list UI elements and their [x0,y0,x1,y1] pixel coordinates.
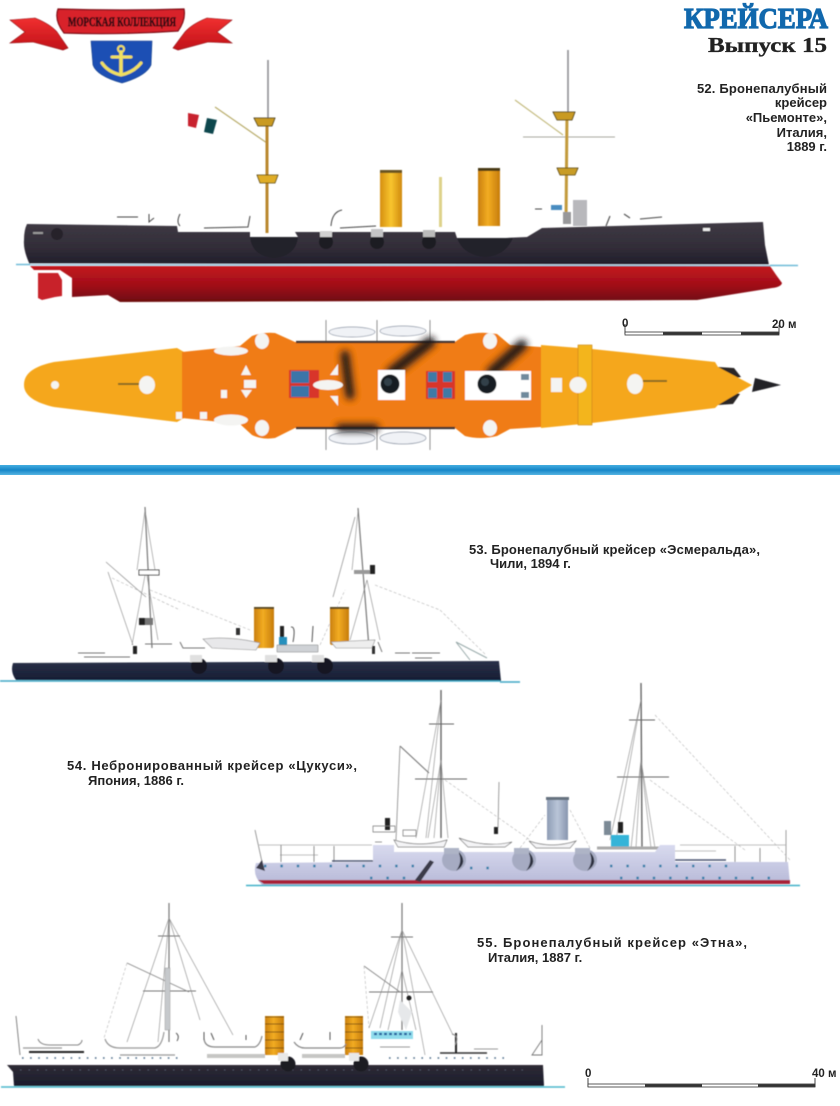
deck hatches [289,370,455,399]
scale bar 20 m: 0 [622,318,628,330]
boats and davit lines [326,320,430,450]
title: КРЕЙСЕРА: КРЕЙСЕРА [684,2,828,35]
cyan bridge [371,1031,413,1039]
ship 54 side elevation [246,683,800,886]
superstructure details [78,626,440,658]
ribbon left tail [10,18,68,50]
funnels [265,1016,363,1055]
caption: ship 52: «Пьемонте», [746,110,827,125]
header emblem: ribbon and shield [10,9,232,83]
scale bar 40 m: 0 [585,1068,591,1080]
portholes [264,866,780,878]
caption: ship 55: Италия, 1887 г. [488,950,582,965]
shield with anchor [91,41,152,83]
caption: ship 52: 52. Бронепалубный [697,81,827,96]
masts and rigging [16,903,542,1055]
caption: ship 55: 55. Бронепалубный крейсер «Этна», [477,935,747,950]
waterline [1,1086,565,1088]
scale bar 20 m: 20 м [772,319,796,331]
masts and rigging [106,507,487,660]
aft hull and ram [541,345,781,428]
deck details [117,200,662,228]
scale bar 20 m [622,318,796,335]
waterline [246,884,800,886]
ribbon lettering: МОРСКАЯ КОЛЛЕКЦИЯ [68,14,176,29]
deck portholes [22,1057,505,1059]
sponsons [190,655,333,674]
ship 55 side elevation [1,903,565,1087]
ship 53 side elevation [0,507,520,682]
caption: ship 53: Чили, 1894 г. [490,556,571,571]
fore gaff and mast [515,50,615,223]
hull [12,661,501,681]
dark upper hull [24,222,769,265]
caption: ship 55 [477,935,747,965]
caption: ship 52: 1889 г. [787,139,827,154]
blue divider band [0,465,840,475]
funnels seen from above [378,370,531,400]
upper works [258,818,786,862]
main orange deck [182,333,541,439]
hull shadows [296,342,455,428]
hull details [20,1069,530,1071]
masts and rigging [255,683,790,862]
caption: ship 52: Италия, [777,125,827,140]
red boot topping [258,880,790,884]
bow and stern dark marks [256,860,434,882]
funnels [380,168,500,227]
funnels [254,607,349,648]
scale bar 40 m: 40 м [812,1068,836,1080]
flag [188,113,217,134]
rudder [38,273,62,300]
ribbon right tail [173,18,232,50]
sponsons [442,848,597,871]
waterline [0,681,520,682]
caption: ship 54: 54. Небронированный крейсер «Цукуси», [67,758,357,773]
funnel [546,797,569,840]
caption: ship 54 [67,758,357,788]
underwater hull [30,266,782,302]
ship 52 deck plan [24,320,781,450]
boats and deck fittings [23,1032,498,1058]
caption: ship 52 [697,81,827,154]
issue label: Выпуск 15 [708,33,827,57]
guns and white fittings [51,333,643,436]
caption: ship 54: Япония, 1886 г. [88,773,184,788]
sponsons [278,1053,368,1072]
smoke streaks [340,342,522,428]
forward hull [24,348,184,422]
waterline [16,264,798,266]
sponsons [33,228,710,258]
rear gaff and mast [215,60,278,233]
scale bar 40 m [585,1068,836,1087]
gun barrels [118,381,667,384]
caption: ship 53: 53. Бронепалубный крейсер «Эсмеральда», [469,542,760,557]
ship 52 side elevation [16,50,798,302]
caption: ship 53 [469,542,760,571]
anchor [102,46,141,75]
hull [255,845,790,885]
caption: ship 52: крейсер [775,95,827,110]
hull [7,1065,544,1086]
ribbon centre [57,9,184,34]
